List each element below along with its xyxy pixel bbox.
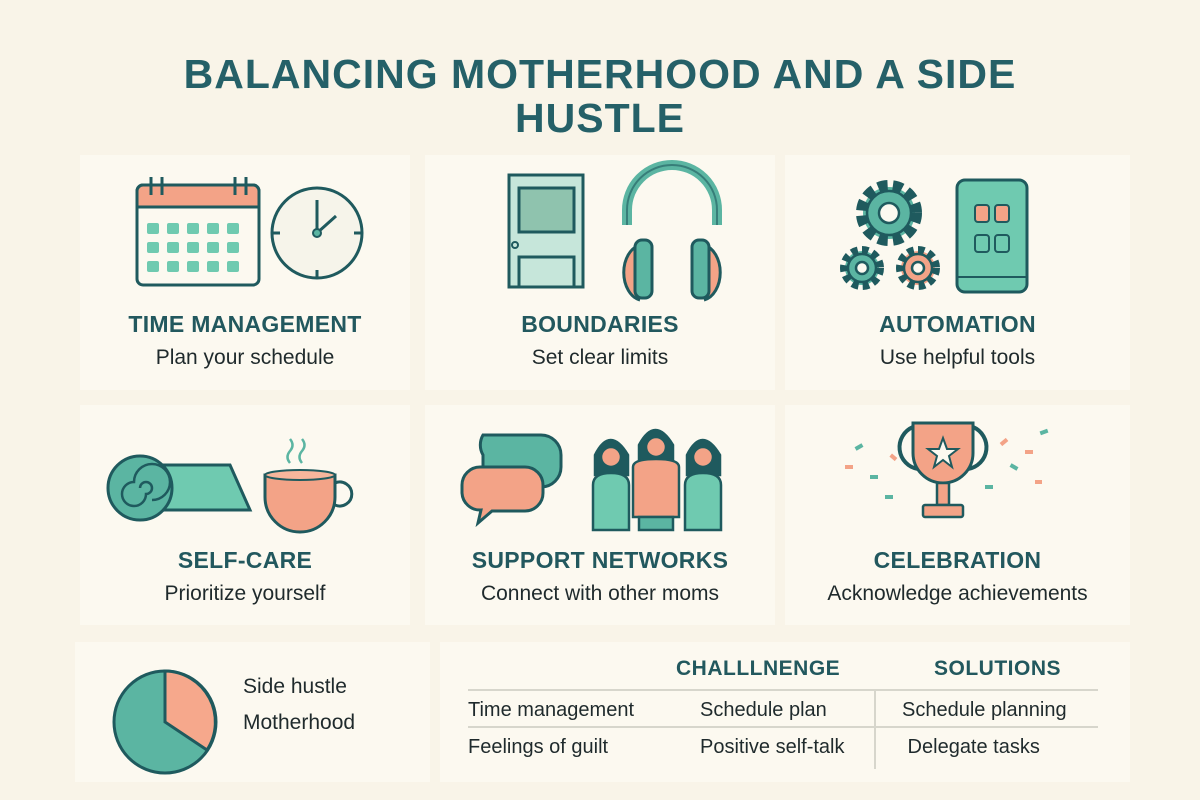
table rows: Time management: [468, 699, 634, 721]
text: prioritize yourself: Prioritize yourself: [164, 582, 326, 605]
text: plan your schedule: Plan your schedule: [156, 346, 334, 369]
title: BALANCING MOTHERHOOD AND A SIDE: [184, 51, 1016, 97]
icon: trophy and confetti: [845, 422, 1048, 518]
panel: pie chart: [75, 642, 430, 782]
legend: Side hustle: [243, 675, 347, 698]
text: use helpful tools: Use helpful tools: [880, 346, 1035, 369]
table headers: CHALLLNENGE: [676, 657, 840, 680]
panel: automation: [785, 155, 1130, 390]
title: [184, 51, 1016, 141]
panel: challenges table: Positive self-talk: [700, 736, 844, 758]
icon: calendar and clock: [136, 177, 364, 286]
heading: automation: AUTOMATION: [879, 311, 1036, 337]
icon: speech bubbles and moms: [460, 428, 722, 532]
panel: challenges table: SOLUTIONS: [934, 657, 1061, 680]
text: acknowledge achievements: Acknowledge achievements: [827, 582, 1088, 605]
pie chart: [112, 670, 218, 774]
heading: support networks: SUPPORT NETWORKS: [472, 547, 728, 573]
legend: Motherhood: [243, 711, 355, 734]
table rows: [468, 699, 634, 758]
text: set clear limits: Set clear limits: [532, 346, 668, 369]
legend: [243, 675, 355, 734]
heading: time management: TIME MANAGEMENT: [128, 311, 362, 337]
panel: challenges table: Delegate tasks: [908, 736, 1040, 758]
title: HUSTLE: [515, 95, 685, 141]
text: connect with other moms: Connect with other moms: [481, 582, 719, 605]
icon: gears and phone: [840, 178, 1028, 294]
heading: self-care: SELF-CARE: [178, 547, 312, 573]
heading: celebration: CELEBRATION: [874, 547, 1041, 573]
icon: yoga mat and cup: [106, 438, 354, 534]
panel: time management: [80, 155, 410, 390]
table rows: Feelings of guilt: [468, 736, 608, 758]
panel: challenges table: Schedule planning: [902, 699, 1067, 721]
panel: boundaries: [425, 155, 775, 390]
panel: challenges table: [440, 642, 1130, 782]
panel: celebration: [785, 405, 1130, 625]
icon: door and headphones: [508, 160, 722, 302]
heading: boundaries: BOUNDARIES: [521, 311, 679, 337]
panel: support networks: [425, 405, 775, 625]
panel: challenges table: Schedule plan: [700, 699, 827, 721]
panel: self-care: [80, 405, 410, 625]
